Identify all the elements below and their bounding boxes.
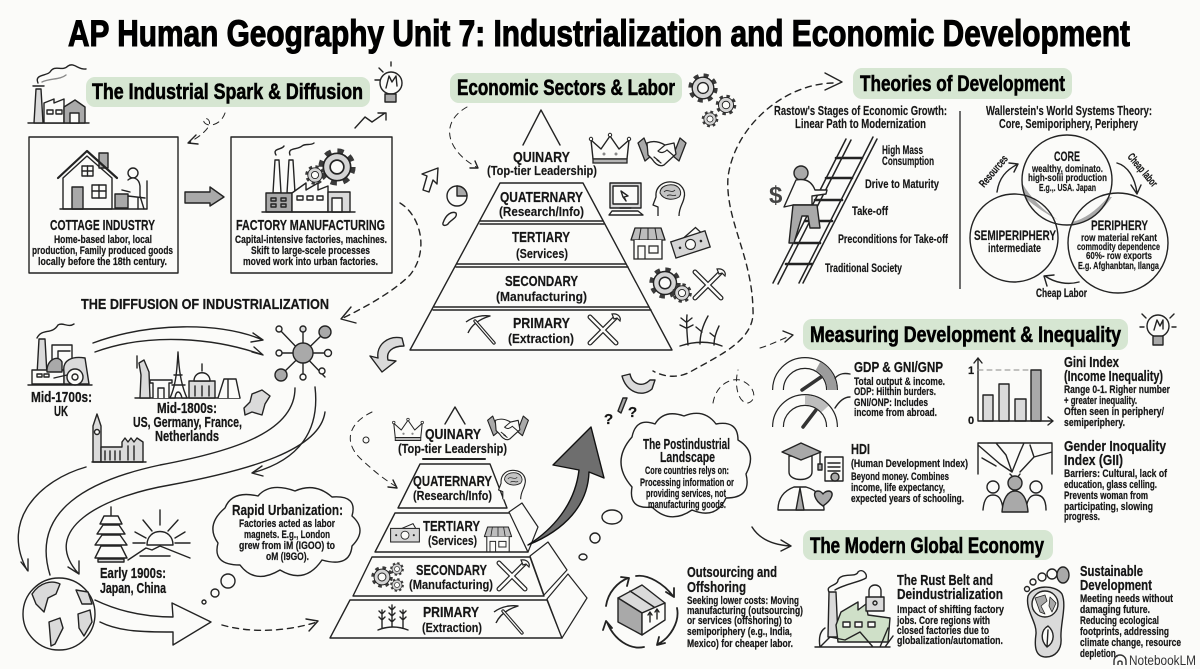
- text: mid-1800s: Mid-1800s:: [157, 400, 217, 417]
- text: outsourcing heading: Offshoring: [687, 579, 746, 596]
- text: axis labels: [968, 365, 974, 427]
- text: postindustrial heading: [643, 436, 730, 466]
- icon: pickaxe: [494, 606, 522, 633]
- icon: person climbing ladder: [773, 137, 877, 284]
- text: wallerstein heading: [986, 103, 1152, 131]
- text: rostow stages: Preconditions for Take-off: [838, 234, 948, 246]
- text: upper pyramid labels: TERTIARY: [512, 229, 570, 246]
- heading pill: economic sectors: Economic Sectors & Labor: [457, 75, 675, 100]
- arrow: big rising arrow: [528, 427, 604, 545]
- text: GII body: Barriers: Cultural, lack of: [1064, 468, 1167, 480]
- text: postindustrial body: manufacturing goods.: [648, 499, 726, 511]
- icons: gears: [373, 563, 403, 591]
- diagram: world systems circles: [970, 135, 1168, 293]
- text: periphery: row material reKant: [1081, 233, 1158, 244]
- text: rust belt body: closed factories due to: [897, 625, 989, 637]
- text: lower pyramid labels: [413, 426, 492, 621]
- text: semiperiphery: intermediate: [988, 243, 1041, 255]
- text: outsourcing heading: [687, 564, 777, 596]
- text: cottage industry: COTTAGE INDUSTRY: [50, 217, 155, 234]
- text: gini body: Range 0-1. Righer number: [1064, 384, 1171, 396]
- text: HDI subtitle and body: Beyond money. Combines: [851, 471, 949, 483]
- text: periphery: [1077, 217, 1160, 272]
- text: urbanization body: grew from iM (IGOO) to: [239, 540, 335, 552]
- text: upper pyramid sublabels: (Manufacturing): [496, 289, 587, 304]
- icon: factory with smoke: [28, 65, 89, 123]
- text: core: CORE: [1054, 148, 1080, 164]
- text: gini body: semiperiphery.: [1064, 417, 1125, 429]
- text: periphery: E.g. Afghanbtan, Ilanga: [1078, 261, 1159, 272]
- text: upper pyramid sublabels: [487, 163, 597, 346]
- text: early 1900s: [100, 565, 166, 597]
- icons: heading gears: [690, 75, 735, 126]
- text: periphery: PERIPHERY: [1091, 217, 1148, 233]
- text: upper pyramid sublabels: (Top-tier Leadership): [487, 163, 597, 178]
- text: GDP heading: GDP & GNI/GNP: [854, 359, 943, 376]
- heading pill: theories: [853, 68, 1072, 99]
- arrow: dashed squiggle to cottage box: [188, 113, 225, 144]
- icon: light bulb and rising arrow: [355, 62, 402, 128]
- icon: head with brain: [499, 470, 525, 499]
- text: rust belt body: Impact of shifting factory: [897, 604, 1005, 616]
- divider: [959, 111, 961, 289]
- text: upper pyramid sublabels: (Extraction): [508, 331, 574, 346]
- text: question marks: [604, 404, 637, 428]
- text: outsourcing body: or services (offshoring) to: [687, 615, 792, 627]
- text: lower pyramid sublabels: (Manufacturing): [409, 577, 493, 592]
- text: mid-1800s: Netherlands: [155, 428, 219, 445]
- text: sustainable body: [1080, 593, 1181, 660]
- text: HDI subtitle and body: (Human Development Index): [851, 458, 968, 470]
- text: rostow heading: Linear Path to Modernization: [795, 116, 926, 131]
- text: postindustrial heading: The Postindustrial: [643, 436, 730, 453]
- arrow: dashed from sectors to diffusion: [341, 203, 421, 323]
- heading pill: modern global economy: [803, 530, 1053, 560]
- text: lower pyramid sublabels: (Extraction): [422, 620, 482, 635]
- text: postindustrial body: Core countries relys on:: [645, 465, 729, 477]
- text: cottage description: locally before the 18th century.: [38, 256, 167, 268]
- icon: shipping box with cycle arrows: [603, 576, 678, 648]
- text: gini body: [1064, 384, 1171, 429]
- text: GDP body: [854, 376, 945, 419]
- panel: the modern global economy: [603, 527, 1181, 660]
- icon: crown: [392, 418, 424, 440]
- text: cottage description: Home-based labor, local: [54, 234, 152, 246]
- arrow: dashed to theories: [653, 73, 842, 376]
- text: upper pyramid labels: QUINARY: [513, 149, 570, 166]
- text: factory description: [235, 234, 387, 268]
- arrow: dashed loop: [713, 370, 754, 403]
- text: GII body: participating, slowing: [1064, 501, 1153, 513]
- arrow: dashed to measuring: [760, 331, 793, 348]
- icon: crops: [680, 315, 722, 346]
- text: early 1900s: Early 1900s:: [100, 565, 166, 582]
- icon: crown: [589, 133, 631, 163]
- text: GII heading: Index (GII): [1064, 452, 1123, 469]
- text: rostow stages: [825, 145, 948, 275]
- text: flow labels: Cheap labor: [1125, 151, 1160, 190]
- text: outsourcing body: Seeking lower costs: Moving: [687, 595, 799, 607]
- arrow: dashed to lower pyramid: [222, 619, 318, 631]
- icons: magnet, pencil and question marks: [604, 374, 655, 428]
- icon: footprint with globe and leaf: [1024, 567, 1069, 657]
- text: GII body: education, glass celling.: [1064, 479, 1157, 491]
- text: axis labels: 0: [968, 415, 974, 427]
- icon: western landmarks: [135, 352, 240, 398]
- icon: pickaxe: [466, 316, 494, 343]
- text: mid-1700s: Mid-1700s:: [31, 389, 92, 406]
- text: rostow stages: High Mass: [882, 145, 923, 157]
- text: factory description: Capital-intensive factories, machines.: [235, 234, 387, 246]
- icon: cash: [391, 524, 419, 542]
- panel: theories of development: [773, 68, 1168, 300]
- text: periphery: commodity dependence: [1077, 242, 1160, 253]
- panel: measuring development and inequality: [760, 314, 1176, 523]
- cloud: postindustrial landscape: [621, 413, 750, 517]
- icon: storefront: [484, 527, 512, 552]
- text: lower pyramid labels: QUATERNARY: [413, 473, 492, 490]
- heading pill: measuring: [803, 319, 1128, 350]
- panel: factory manufacturing: [231, 137, 392, 273]
- text: sustainable heading: Development: [1080, 577, 1152, 594]
- text: semiperiphery: [974, 227, 1056, 255]
- arrow: curve to modern global economy: [752, 527, 791, 551]
- text: postindustrial body: [640, 465, 734, 511]
- text: question marks: ?: [604, 411, 613, 428]
- text: wallerstein heading: Core, Semiporiphery, Periphery: [999, 116, 1139, 131]
- text: HDI subtitle and body: expected years of schooling.: [851, 493, 964, 505]
- text: core: high-solii production: [1028, 173, 1107, 184]
- icon: graduate with diploma and heart: [778, 443, 843, 510]
- text: cottage description: [32, 234, 173, 268]
- text: rust belt heading: The Rust Belt and: [897, 572, 993, 589]
- pyramid: stacked lower layers: [330, 407, 587, 638]
- text: semiperiphery: SEMIPERIPHERY: [974, 227, 1056, 243]
- text: factory description: moved work into urban factories.: [243, 256, 378, 268]
- text: upper pyramid labels: QUATERNARY: [500, 189, 583, 206]
- text: lower pyramid labels: QUINARY: [425, 426, 481, 443]
- icon: thought bubbles: [579, 510, 622, 560]
- text: GDP body: ODP: Hilthin burders.: [854, 386, 936, 398]
- text: rust belt body: globalization/automation.: [897, 635, 1003, 647]
- text: lower pyramid sublabels: [398, 441, 507, 635]
- icon: crossed tools: [499, 560, 529, 589]
- text: gini heading: [1064, 354, 1163, 385]
- text: lower pyramid sublabels: (Top-tier Leadership): [398, 441, 507, 456]
- icon: cash: [669, 225, 710, 258]
- text: lower pyramid labels: PRIMARY: [423, 604, 479, 621]
- icon: storefront: [631, 228, 665, 259]
- pyramid: upper: [410, 110, 672, 350]
- text: sustainable body: damaging future.: [1080, 604, 1150, 616]
- text: postindustrial body: Processing information or: [640, 477, 734, 489]
- panel: cottage industry: [29, 137, 178, 273]
- text: mid-1800s: US, Germany, France,: [133, 414, 242, 431]
- text: upper pyramid sublabels: (Services): [516, 246, 568, 261]
- text: rostow stages: Drive to Maturity: [865, 179, 939, 191]
- icon: netherlands map: [244, 390, 270, 415]
- text: HDI subtitle and body: [851, 458, 968, 505]
- heading pill: theories: Theories of Development: [860, 71, 1066, 96]
- text: postindustrial heading: Landscape: [660, 449, 715, 466]
- text: rostow stages: Consumption: [882, 156, 934, 168]
- heading pill: modern global economy: The Modern Global Economy: [810, 533, 1045, 558]
- text: urbanization body: Factories acted as labor: [239, 518, 336, 530]
- panel: the industrial spark and diffusion: [18, 62, 402, 650]
- icon: dollar sign: $: [769, 182, 783, 209]
- text: rust belt body: [896, 604, 1005, 647]
- arrow: dashed loop to quaternary: [350, 412, 397, 488]
- icon: handshake: [638, 138, 686, 166]
- text: flow labels: [977, 151, 1160, 300]
- text: core: [1028, 148, 1107, 194]
- icons: gears: [651, 269, 690, 302]
- icon: GDP gauges: [778, 363, 850, 427]
- text: GDP body: income from abroad.: [854, 407, 937, 419]
- icon: wheat: [378, 605, 408, 630]
- text: rust belt body: jobs. Core regions with: [896, 615, 990, 627]
- text: GDP body: GNI/ONP: Includes: [854, 397, 928, 409]
- icon: handshake: [488, 416, 528, 440]
- icon: big ben and parliament: [92, 414, 146, 462]
- icon: head with brain: [653, 182, 684, 216]
- text: HDI subtitle and body: income, life expectancy,: [851, 482, 945, 494]
- text: cottage description: production, Family produced goods: [32, 245, 173, 257]
- text: outsourcing heading: Outsourcing and: [687, 564, 777, 581]
- text: flow labels: Cheap Labor: [1036, 288, 1087, 300]
- icon: light bulb: [1140, 314, 1176, 345]
- heading pill: measuring: Measuring Development & Inequality: [810, 322, 1122, 347]
- text: axis labels: 1: [968, 365, 974, 377]
- icon: small gear: [306, 166, 324, 184]
- text: GII heading: Gender Inoquality: [1064, 438, 1167, 455]
- text: gini body: + greater inequality.: [1064, 395, 1137, 407]
- text: gini heading: Gini Index: [1064, 354, 1119, 371]
- heading pill: industrial spark: [86, 77, 370, 107]
- text: urbanization heading: Rapid Urbanization:: [232, 502, 343, 519]
- arrow: gray curled arrow: [370, 337, 404, 372]
- icon: abandoned factory with lock: [815, 571, 893, 647]
- text: urbanization body: magnets. E.g., London: [244, 529, 330, 541]
- text: sustainable heading: Sustainable: [1080, 563, 1143, 580]
- arrow: cottage to factory: [185, 187, 224, 206]
- text: outsourcing body: semiporiphery (e.g., India,: [687, 626, 792, 638]
- arrows: world systems flows: [997, 163, 1141, 286]
- text: rust belt heading: [897, 572, 1003, 603]
- icon: UK steam engine factory: [28, 324, 92, 385]
- icon: factory and gears: [262, 143, 355, 212]
- text: mid-1800s: [133, 400, 242, 445]
- icon: diffusion hub and nodes: [275, 326, 332, 381]
- text: upper pyramid labels: SECONDARY: [505, 273, 578, 290]
- panel: economic sectors and labor: [410, 73, 735, 350]
- text: sustainable body: Meeting needs without: [1080, 593, 1173, 605]
- text: mid-1700s: [31, 389, 92, 420]
- panel: lower pyramid: [330, 407, 587, 638]
- text: outsourcing body: [687, 595, 803, 650]
- icon: large gear: [321, 151, 353, 183]
- text: rostow stages: Take-off: [852, 206, 888, 218]
- text: mid-1700s: UK: [54, 403, 68, 420]
- arrows: UK to hub: [93, 327, 263, 355]
- text: GII body: Prevents woman from: [1064, 490, 1148, 502]
- text: sustainable body: footprints, addressing: [1080, 626, 1169, 638]
- text: lower pyramid sublabels: (Services): [428, 533, 477, 548]
- text: upper pyramid sublabels: (Research/Info): [499, 204, 584, 219]
- text: early 1900s: Japan, China: [100, 580, 166, 597]
- icon: crossed tools: [695, 269, 725, 298]
- text: GII body: [1064, 468, 1167, 523]
- text: urbanization body: oM (I9GO).: [266, 551, 309, 563]
- text: GDP body: Total output & income.: [854, 376, 945, 388]
- text: lower pyramid sublabels: (Research/Info): [413, 488, 492, 503]
- text: question marks: ?: [628, 404, 637, 421]
- text: rostow heading: Rastow's Stages of Economic Growth:: [774, 103, 947, 118]
- text: HDI heading: HDI: [851, 441, 870, 458]
- arrow: dashed to quinary: [450, 107, 478, 168]
- cloud: rapid urbanization: [213, 487, 360, 576]
- text: sustainable body: depletion.: [1080, 648, 1118, 660]
- text: lower pyramid labels: SECONDARY: [416, 562, 487, 579]
- text: outsourcing body: Mexico) for cheaper labor.: [687, 638, 793, 650]
- text: upper pyramid labels: [500, 149, 583, 332]
- text: sustainable heading: [1080, 563, 1152, 594]
- icon: computer: [609, 183, 643, 215]
- text: factory manufacturing: FACTORY MANUFACTURING: [236, 217, 385, 234]
- heading pill: economic sectors: [450, 73, 682, 103]
- text: factory description: Skift to large-scele processes: [251, 245, 370, 257]
- icon: wrench and fork: [590, 314, 620, 343]
- heading pill: industrial spark: The Industrial Spark & Diffusion: [92, 79, 363, 104]
- text: upper pyramid labels: PRIMARY: [513, 315, 570, 332]
- text: rostow heading: [774, 103, 947, 131]
- chart: gini bars: [968, 358, 1053, 427]
- text: rostow stages: Traditional Society: [825, 263, 902, 275]
- icon: thought bubbles: [202, 574, 235, 604]
- subheading: diffusion: THE DIFFUSION OF INDUSTRIALIZATION: [81, 296, 329, 313]
- icon: glass ceiling and women: [978, 443, 1052, 512]
- icons: small arrow, pie chart and blob: [422, 168, 467, 225]
- icon: cottage and woman at spinning wheel: [58, 151, 147, 209]
- text: gini heading: (Income Inequality): [1064, 368, 1163, 385]
- text: lower pyramid labels: TERTIARY: [423, 518, 480, 535]
- text: gini body: Often seen in periphery/: [1064, 406, 1164, 418]
- text: rust belt heading: Deindustrialization: [897, 586, 1003, 603]
- text: urbanization body: [239, 518, 336, 563]
- text: sustainable body: Reducing ecological: [1080, 615, 1159, 627]
- text: periphery: 60%- row exports: [1086, 251, 1152, 262]
- text: GII heading: [1064, 438, 1167, 469]
- icon: pagoda and rising sun: [95, 507, 190, 562]
- text: core: E.g.,. USA. Japan: [1039, 183, 1096, 194]
- arrows: diffusion flows: [18, 387, 325, 575]
- text: core: wealthy, dominato.: [1031, 164, 1103, 175]
- text: postindustrial body: providing services, not: [646, 488, 726, 500]
- arrow: outlined arrow from globe: [95, 600, 211, 645]
- text: flow labels: Resources: [977, 153, 1011, 190]
- icon: globe: [23, 578, 95, 650]
- text: GII body: progress.: [1064, 511, 1100, 523]
- text: outsourcing body: manufacturing (outsourcing): [687, 605, 803, 617]
